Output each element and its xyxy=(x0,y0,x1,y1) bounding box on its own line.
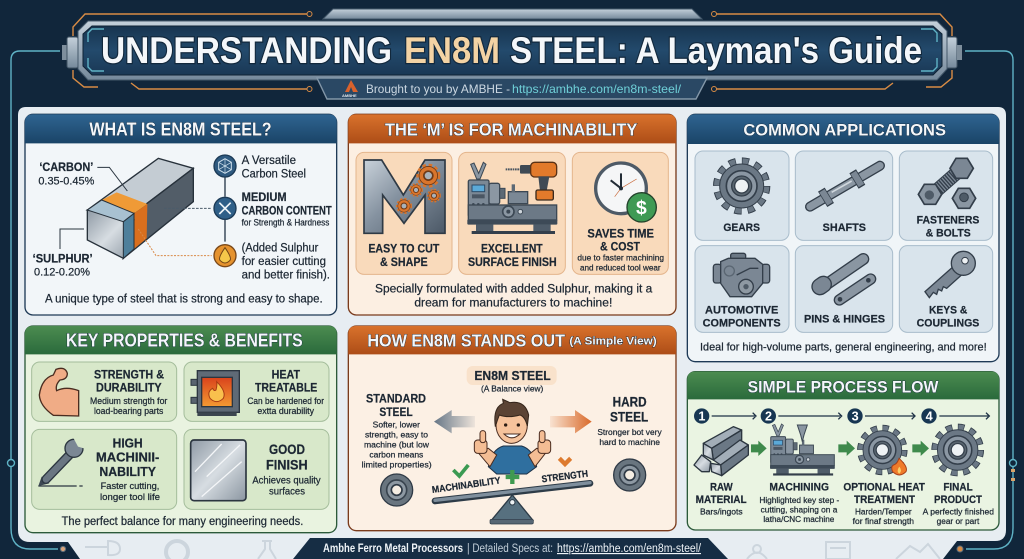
step 4 text: FINAL xyxy=(943,481,973,493)
card: surface finish xyxy=(459,152,565,274)
panel: how EN8M stands out xyxy=(348,326,676,531)
icon: flexed arm xyxy=(39,368,79,416)
icon: plus xyxy=(506,470,519,484)
step 2 text: latha/CNC machine xyxy=(763,514,835,524)
standard steel: STANDARD xyxy=(366,392,426,406)
icon: gear xyxy=(717,161,766,211)
step 3 text: for finaf strength xyxy=(853,516,914,526)
icon: key xyxy=(925,251,975,298)
footer tab: Ambhe Ferro Metal Processors xyxy=(323,543,463,555)
card: shafts xyxy=(795,151,893,240)
key facts: A Versatile xyxy=(242,153,296,167)
card: heat treatable xyxy=(184,362,329,421)
step 4 text xyxy=(923,481,994,526)
label: EASY TO CUT xyxy=(368,242,440,256)
EN8M label: (A Balance view) xyxy=(481,384,544,394)
standard steel: Softer, lower xyxy=(373,420,420,430)
carbon label: ‘CARBON’ xyxy=(39,160,93,174)
hard steel: STEEL xyxy=(610,409,649,425)
strength text: load-bearing parts xyxy=(94,406,164,416)
standard steel: limited properties) xyxy=(362,459,432,469)
caption: Ideal for high-volume parts, general engineering, and more! xyxy=(700,342,987,354)
step badges and timeline arrows: 4 xyxy=(926,410,933,424)
strength text: DURABILITY xyxy=(96,381,162,395)
hard steel: HARD xyxy=(613,394,647,410)
icon: steel M with gears xyxy=(364,160,445,233)
heading: THE ‘M’ IS FOR MACHINABILITY xyxy=(385,120,638,140)
carbon label: 0.35-0.45% xyxy=(38,175,94,187)
icon: drill xyxy=(506,162,557,200)
label: EXCELLENT xyxy=(481,242,543,256)
step arrow xyxy=(912,441,929,456)
subtitle tab: AMBHE xyxy=(342,93,357,98)
key facts xyxy=(242,153,332,281)
main title: STEEL: A Layman's Guide xyxy=(510,30,922,71)
decorative copper traces of the header xyxy=(73,12,952,92)
machinability text: longer tool life xyxy=(100,492,160,502)
main title: UNDERSTANDING xyxy=(101,30,392,71)
machinability text xyxy=(96,436,160,502)
icon: check mark xyxy=(453,465,468,476)
heading: HOW EN8M STANDS OUT xyxy=(367,331,565,351)
step 4 text: PRODUCT xyxy=(934,494,982,506)
label: SURFACE FINISH xyxy=(468,255,557,269)
panel: common applications xyxy=(687,114,999,362)
light content board xyxy=(18,107,1006,559)
label xyxy=(368,242,440,269)
step 3 text: OPTIONAL HEAT xyxy=(843,481,925,493)
key facts: for easier cutting xyxy=(242,254,326,268)
card: keys and couplings: KEYS & xyxy=(929,304,967,316)
step badges and timeline arrows: 2 xyxy=(765,410,772,424)
caption: A unique type of steel that is strong and easy to shape. xyxy=(45,291,323,305)
caption: The perfect balance for many engineering needs. xyxy=(62,514,303,528)
label: and reduced tool wear xyxy=(580,263,661,273)
label xyxy=(577,226,664,273)
smiling engineer xyxy=(474,399,551,474)
icon: clock and coin: $ xyxy=(636,198,647,219)
heading: SIMPLE PROCESS FLOW xyxy=(748,377,939,396)
standard steel: STEEL xyxy=(379,405,413,419)
key facts: CARBON CONTENT xyxy=(242,203,332,217)
step arrow xyxy=(838,441,855,456)
icon: heated gear xyxy=(861,428,906,475)
footer tab: | Detailed Specs at: xyxy=(467,543,553,555)
card: gears: GEARS xyxy=(723,222,760,234)
balance scale xyxy=(435,483,590,524)
icon: crossed tools xyxy=(214,197,236,219)
finish text: Achieves quality xyxy=(252,475,321,486)
step 1 text: Bars/ingots xyxy=(700,507,743,517)
caption: Specially formulated with added Sulphur, making it a xyxy=(375,282,652,296)
footer tab: https://ambhe.com/en8m-steel/ xyxy=(557,543,702,555)
EN8M label: EN8M STEEL xyxy=(474,369,551,383)
EN8M label xyxy=(467,366,557,394)
heading: WHAT IS EN8M STEEL? xyxy=(89,119,272,140)
icon: carbon lattice xyxy=(214,155,236,177)
step badges and timeline arrows: 3 xyxy=(852,410,859,424)
carbon label xyxy=(38,160,127,191)
icon: polished plate xyxy=(191,440,246,501)
step 2 text: MACHINING xyxy=(769,481,829,493)
hard steel xyxy=(597,394,662,447)
subtitle tab: https://ambhe.com/en8m-steel/ xyxy=(512,82,682,96)
step 3 text: TREATMENT xyxy=(854,494,915,506)
standard steel: carbon means xyxy=(369,450,424,460)
icon: lathe xyxy=(467,162,557,234)
key facts: Carbon Steel xyxy=(242,167,306,181)
card: pins and hinges: PINS & HINGES xyxy=(804,313,885,325)
card: keys and couplings xyxy=(899,246,993,332)
step 2 text: cutting, shaping on a xyxy=(761,505,838,515)
title plate xyxy=(78,21,947,80)
subtitle tab xyxy=(317,78,707,99)
finish text: surfaces xyxy=(269,486,305,497)
connector lines xyxy=(138,177,225,256)
icon: bolt and nut xyxy=(918,158,976,208)
step badges and timeline arrows xyxy=(694,408,989,424)
machinability text: NABILITY xyxy=(99,465,157,479)
card: shafts: SHAFTS xyxy=(823,222,866,234)
card: fasteners xyxy=(899,151,993,240)
step 3 text: Harden/Temper xyxy=(855,506,912,516)
step badges and timeline arrows: 1 xyxy=(698,410,705,424)
steel bar illustration xyxy=(87,158,193,258)
card: good finish xyxy=(184,429,329,509)
standard steel: machine (but low xyxy=(364,440,430,450)
heading xyxy=(25,114,337,143)
heat text: extta durability xyxy=(257,406,314,416)
icon: steel ingots xyxy=(694,427,748,476)
heading xyxy=(348,114,676,143)
label: due to faster machining xyxy=(577,253,664,263)
arrow left xyxy=(434,410,475,433)
key facts: MEDIUM xyxy=(242,190,287,204)
label xyxy=(468,242,557,269)
heading: (A Simple View) xyxy=(569,335,657,347)
finish text: GOOD xyxy=(269,442,305,457)
panel: the M is for machinability xyxy=(348,114,676,315)
icon: engine xyxy=(713,253,770,297)
step 1 text xyxy=(696,481,747,517)
step 4 text: A perfectly finished xyxy=(923,506,994,516)
card: gears xyxy=(695,151,789,240)
heading xyxy=(687,114,999,144)
heat text: HEAT xyxy=(272,367,301,381)
panel: simple process flow xyxy=(687,372,999,530)
heading xyxy=(25,326,337,354)
card: strength and durability xyxy=(32,362,177,421)
card: automotive: COMPONENTS xyxy=(703,318,781,330)
strength text: Medium strength for xyxy=(90,396,167,406)
hard steel: Stronger bot very xyxy=(597,427,662,437)
step arrow xyxy=(751,441,767,456)
top metal tab xyxy=(323,9,702,19)
step 4 text: gear or part xyxy=(937,516,980,526)
card: saves time and cost xyxy=(572,152,668,274)
faint footer icons xyxy=(85,541,940,559)
step 1 text: MATERIAL xyxy=(696,494,747,506)
key facts: (Added Sulphur xyxy=(242,241,318,255)
standard steel: strength, easy to xyxy=(365,430,428,440)
caption: dream for manufacturers to machine! xyxy=(414,296,612,310)
sulphur label xyxy=(33,229,93,279)
strength label: STRENGTH xyxy=(541,469,589,485)
step 2 text: Highlighted key step - xyxy=(759,495,840,505)
step 1 text: RAW xyxy=(710,481,733,493)
icon: CNC lathe xyxy=(770,424,835,476)
key facts: for Strength & Hardness xyxy=(242,218,330,228)
card: keys and couplings: COUPLINGS xyxy=(917,318,980,330)
icon: furnace xyxy=(191,371,239,416)
icon: sulphur drop xyxy=(214,245,236,267)
step 2 text xyxy=(759,481,840,524)
heat text: TREATABLE xyxy=(255,381,317,395)
icon: wrench xyxy=(38,437,87,486)
icon: washer left xyxy=(381,474,413,506)
machinability label: MACHINABILITY xyxy=(431,475,502,496)
icon: washer right xyxy=(614,459,646,491)
machinability text: Faster cutting, xyxy=(101,481,159,491)
machinability text: HIGH xyxy=(113,436,143,450)
card: fasteners: & BOLTS xyxy=(926,228,971,240)
subtitle tab: Brought to you by AMBHE - xyxy=(366,82,510,96)
key facts: and better finish). xyxy=(242,267,330,281)
sulphur label: 0.12-0.20% xyxy=(34,267,90,279)
machinability text: MACHINII- xyxy=(96,451,159,465)
arrow right xyxy=(550,410,592,433)
card: easy to cut xyxy=(356,152,452,274)
side clamps xyxy=(62,37,962,68)
heading: KEY PROPERTIES & BENEFITS xyxy=(66,330,303,351)
footer tab xyxy=(293,538,728,559)
card: high machinability xyxy=(32,429,177,509)
standard steel xyxy=(362,392,432,469)
label: SAVES TIME xyxy=(587,226,654,240)
icon: shaft xyxy=(810,166,880,207)
card: pins and hinges xyxy=(795,246,893,332)
step 3 text xyxy=(843,481,925,526)
heat text xyxy=(247,367,324,416)
main title: EN8M xyxy=(404,30,500,71)
panel: what is EN8M steel xyxy=(25,114,337,315)
strength text xyxy=(90,367,167,416)
icon: finished gear xyxy=(935,427,980,473)
sulphur label: ‘SULPHUR’ xyxy=(33,251,93,265)
label: & SHAPE xyxy=(380,255,428,269)
finish text: FINISH xyxy=(266,457,308,472)
circuit lines right xyxy=(957,51,1016,552)
card: automotive xyxy=(695,246,789,332)
heat text: Can be hardened for xyxy=(247,396,324,406)
panel: key properties and benefits xyxy=(25,326,337,533)
main title xyxy=(101,30,922,71)
heading: COMMON APPLICATIONS xyxy=(743,121,946,140)
caption xyxy=(375,282,652,310)
strength text: STRENGTH & xyxy=(94,367,164,381)
icon: pin and hinge xyxy=(820,259,871,302)
circuit lines left xyxy=(8,51,66,552)
heading xyxy=(687,372,999,399)
heading xyxy=(348,326,676,354)
hard steel: hard to machine xyxy=(599,437,660,447)
header banner xyxy=(62,9,962,99)
finish text xyxy=(252,442,321,497)
card: fasteners: FASTENERS xyxy=(917,214,980,226)
icon: orange tick xyxy=(559,458,571,464)
card: automotive: AUTOMOTIVE xyxy=(705,304,779,316)
label: & COST xyxy=(600,240,641,254)
